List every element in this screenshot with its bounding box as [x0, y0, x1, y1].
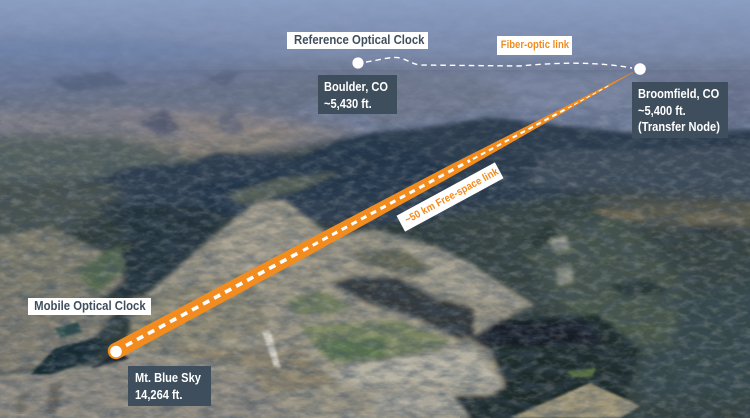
label: Mobile Optical Clock: Mobile Optical Clock: [34, 299, 146, 313]
label: Broomfield: [632, 82, 728, 138]
fiber-optic link dashed line: [366, 57, 632, 68]
label: Boulder: Boulder, CO: [324, 80, 388, 94]
label: Mt. Blue Sky: Mt. Blue Sky: [135, 371, 201, 385]
label: Fiber-optic link: [497, 36, 572, 55]
node: Broomfield: [634, 63, 646, 75]
label: Mt. Blue Sky: 14,264 ft.: [135, 388, 182, 402]
label: Broomfield: ~5,400 ft.: [638, 104, 686, 118]
label: Mt. Blue Sky: [128, 366, 211, 406]
label: Broomfield: Broomfield, CO: [638, 87, 719, 101]
label: free-space link: ~50 km Free-space link: [403, 166, 501, 226]
free-space link beam: [108, 68, 640, 359]
node: Mt. Blue Sky: [110, 346, 122, 357]
label: Fiber-optic link: Fiber-optic link: [501, 39, 569, 51]
node: Boulder: [352, 57, 364, 69]
label: Boulder: [318, 75, 397, 114]
label: Reference Optical Clock: Reference Optical Clock: [294, 33, 424, 47]
label: Broomfield: (Transfer Node): [638, 120, 720, 134]
label: Boulder: ~5,430 ft.: [324, 96, 372, 110]
